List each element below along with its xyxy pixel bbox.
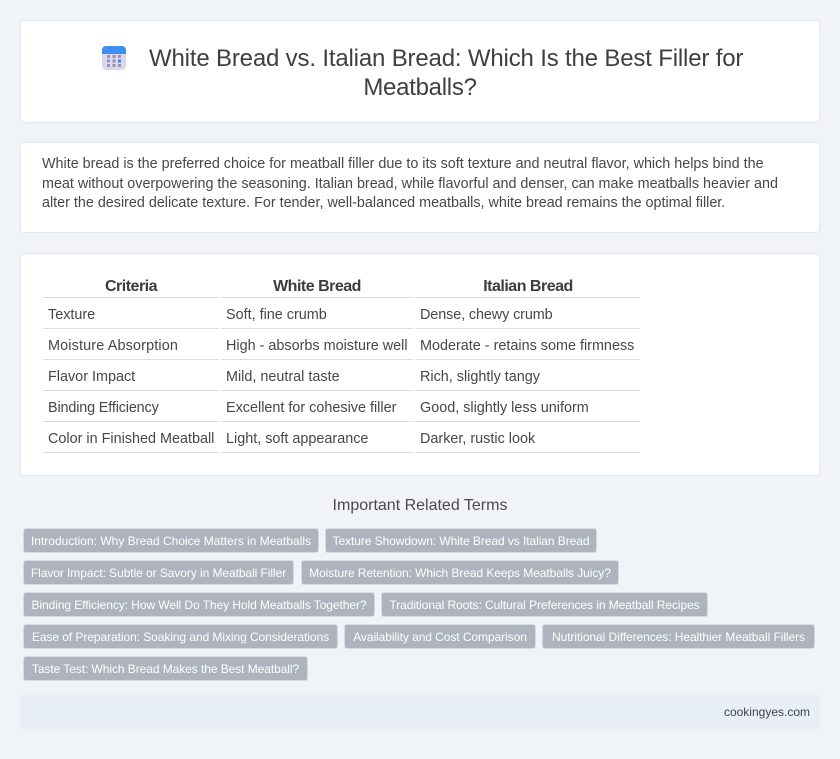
- tag: Introduction: Why Bread Choice Matters in Meatballs: [31, 534, 311, 548]
- footer: [20, 695, 820, 729]
- row: texture: Texture: [48, 307, 95, 323]
- tag: Availability and Cost Comparison: [353, 630, 527, 644]
- row: flavor impact: Rich, slightly tangy: [420, 369, 540, 385]
- tag: [325, 528, 597, 553]
- row: flavor impact: Mild, neutral taste: [226, 369, 340, 385]
- tag: [23, 656, 308, 681]
- tag: Nutritional Differences: Healthier Meatball Fillers: [552, 630, 805, 644]
- tag: [23, 592, 375, 617]
- row: binding efficiency: Excellent for cohesive filler: [226, 400, 396, 416]
- tag: [23, 528, 319, 553]
- tag: [381, 592, 708, 617]
- row: flavor impact: Flavor Impact: [48, 369, 135, 385]
- icon: calendar: [102, 46, 126, 70]
- comparison table: [43, 278, 640, 453]
- tag: [542, 624, 815, 649]
- text block: introduction: White bread is the preferred choice for meatball filler due to its soft texture and neutral flavor, which helps bind the: [42, 156, 764, 172]
- row: color in finished meatball: Darker, rustic look: [420, 431, 535, 447]
- row: texture: Soft, fine crumb: [226, 307, 327, 323]
- footer source text: cookingyes.com: [724, 705, 810, 719]
- text block: introduction: [42, 156, 778, 211]
- tag: Taste Test: Which Bread Makes the Best Meatball?: [32, 662, 299, 676]
- row: moisture absorption: [48, 338, 634, 354]
- row: color in finished meatball: [48, 431, 536, 447]
- tag: [23, 560, 294, 585]
- column headers: Italian Bread: [483, 278, 573, 295]
- title: White Bread vs. Italian Bread: Which Is the Best Filler for: [149, 45, 743, 72]
- tag: Ease of Preparation: Soaking and Mixing Considerations: [32, 630, 329, 644]
- row: binding efficiency: Good, slightly less uniform: [420, 400, 589, 416]
- title: [149, 45, 743, 101]
- row: moisture absorption: High - absorbs moisture well: [226, 338, 408, 354]
- tag: [23, 624, 338, 649]
- column headers: White Bread: [273, 278, 361, 295]
- row: texture: Dense, chewy crumb: [420, 307, 553, 323]
- tag: Traditional Roots: Cultural Preferences in Meatball Recipes: [389, 598, 700, 612]
- row: binding efficiency: [48, 400, 589, 416]
- tag: [301, 560, 619, 585]
- tag: [344, 624, 536, 649]
- row: flavor impact: [48, 369, 540, 385]
- tag: Binding Efficiency: How Well Do They Hold Meatballs Together?: [31, 598, 367, 612]
- tag: Texture Showdown: White Bread vs Italian Bread: [333, 534, 589, 548]
- panel: title header: [20, 20, 820, 123]
- row: moisture absorption: Moisture Absorption: [48, 338, 178, 354]
- row: texture: [48, 307, 553, 323]
- row: color in finished meatball: Light, soft appearance: [226, 431, 368, 447]
- tag: Flavor Impact: Subtle or Savory in Meatball Filler: [31, 566, 286, 580]
- column headers: Criteria: [105, 278, 157, 295]
- text block: introduction: alter the desired delicate texture. For tender, well-balanced meatballs, white bread remains the optimal filler.: [42, 195, 725, 211]
- tag: Moisture Retention: Which Bread Keeps Meatballs Juicy?: [309, 566, 611, 580]
- panel: introduction: [20, 142, 820, 233]
- title: Meatballs?: [363, 74, 477, 101]
- text block: introduction: meat without overpowering the seasoning. Italian bread, while flavorful and denser, can make meatballs heavier and: [42, 176, 778, 192]
- panel: comparison table: [20, 253, 820, 476]
- row: color in finished meatball: Color in Finished Meatball: [48, 431, 214, 447]
- heading: important related terms: Important Related Terms: [333, 497, 507, 514]
- related term tags: [23, 528, 815, 681]
- column headers: [105, 278, 573, 295]
- row: binding efficiency: Binding Efficiency: [48, 400, 159, 416]
- row: moisture absorption: Moderate - retains some firmness: [420, 338, 634, 354]
